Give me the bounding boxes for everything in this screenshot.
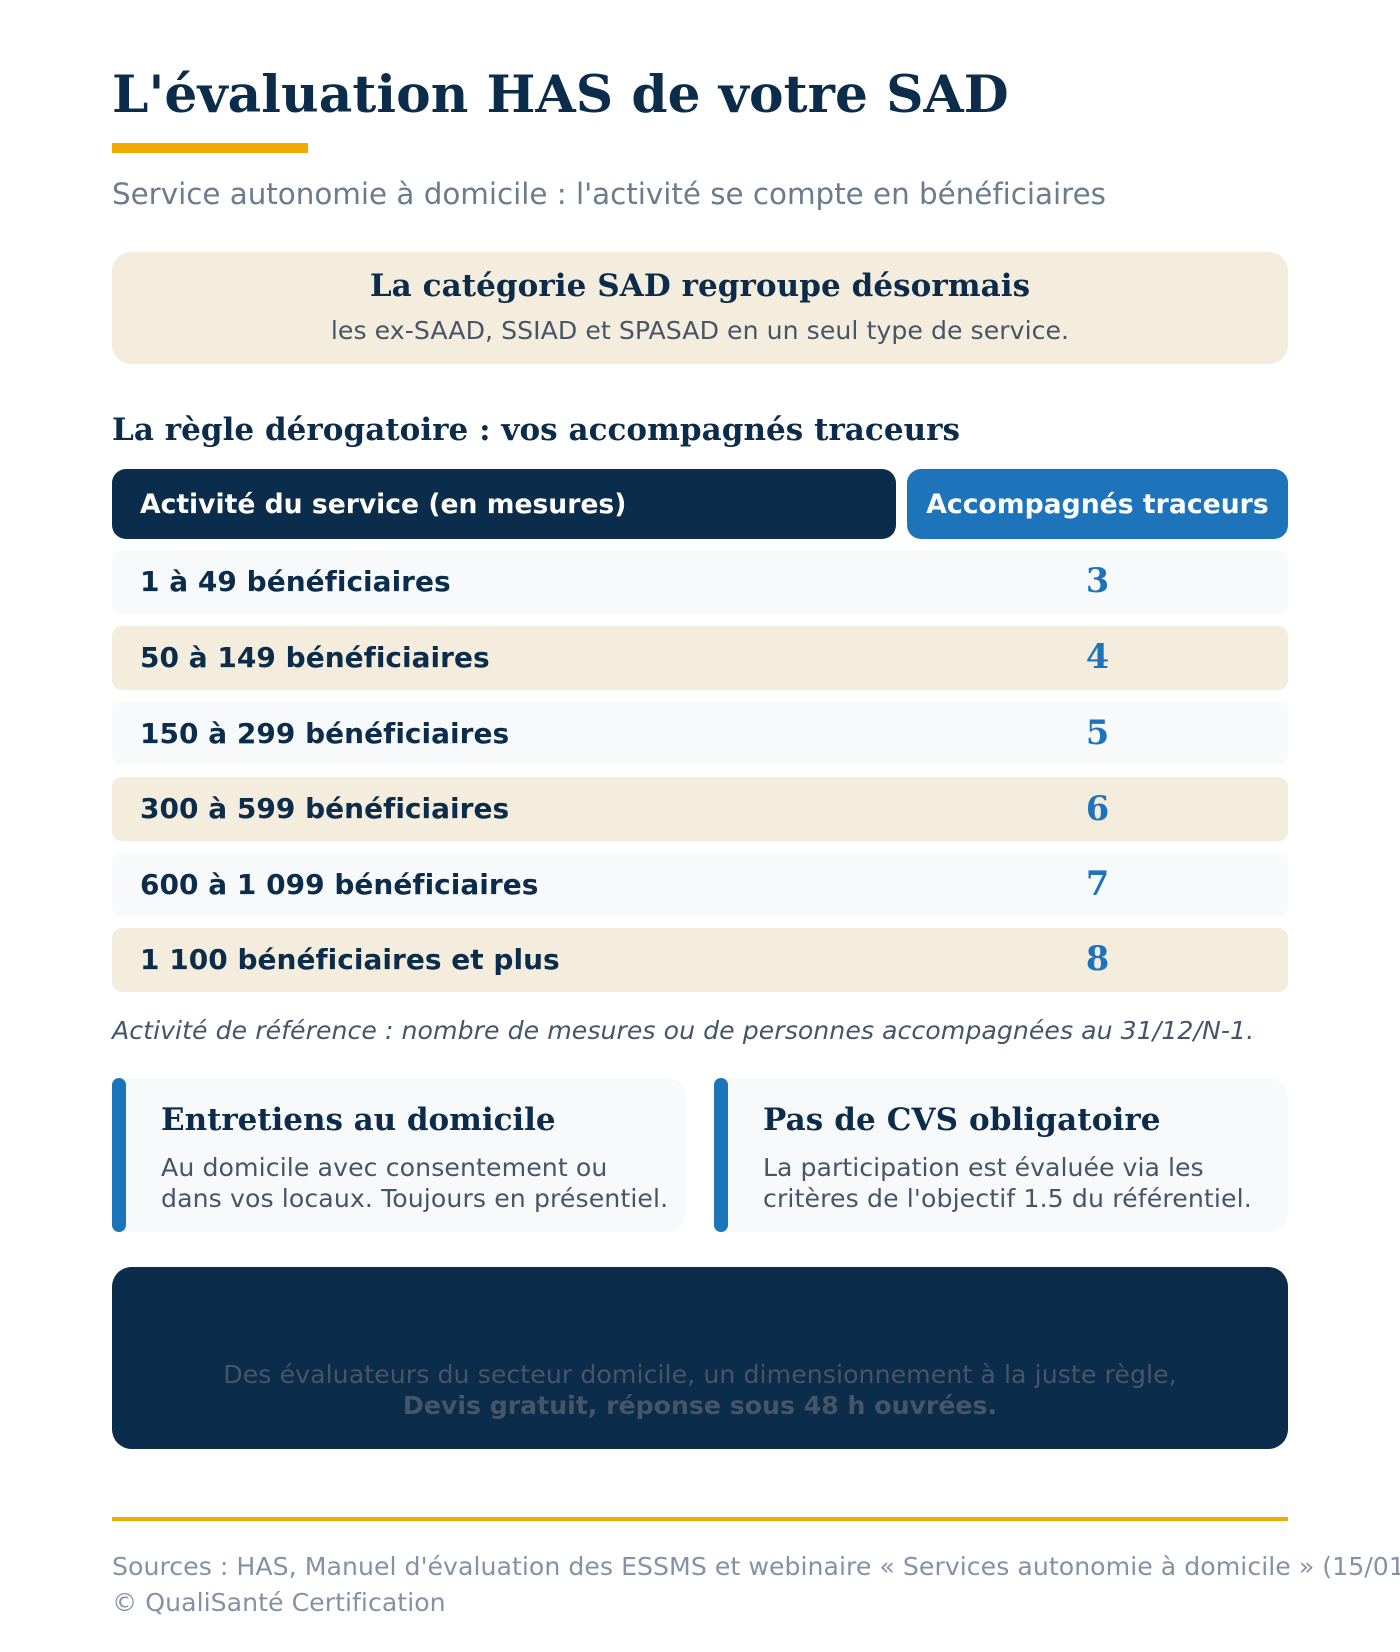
card text: Au domicile avec consentement ou	[161, 1153, 607, 1182]
card text	[763, 1153, 1252, 1213]
table row 5: 7	[1086, 863, 1109, 903]
icon: card accent bar	[112, 1078, 126, 1232]
table row 5: 600 à 1 099 bénéficiaires	[140, 868, 538, 901]
table row 6: 1 100 bénéficiaires et plus	[140, 943, 560, 976]
footer divider	[112, 1517, 1288, 1521]
card heading: Entretiens au domicile	[161, 1102, 556, 1138]
banner heading: La catégorie SAD regroupe désormais	[370, 268, 1030, 304]
banner text: les ex-SAAD, SSIAD et SPASAD en un seul type de service.	[331, 316, 1069, 345]
card text: dans vos locaux. Toujours en présentiel.	[161, 1184, 668, 1213]
footer sources	[112, 1552, 1400, 1617]
header label: Accompagnés traceurs	[926, 488, 1269, 520]
table row 3: 150 à 299 bénéficiaires	[140, 717, 509, 750]
card text: critères de l'objectif 1.5 du référentiel.	[763, 1184, 1252, 1213]
footer sources: Sources : HAS, Manuel d'évaluation des ESSMS et webinaire « Services autonomie à domicile » (15/01	[112, 1552, 1400, 1581]
panel: SAD category banner	[112, 252, 1288, 364]
table row 2: 50 à 149 bénéficiaires	[140, 641, 490, 674]
table row 4: 6	[1086, 788, 1109, 828]
panel: CVS card	[714, 1078, 1288, 1232]
table row 6	[112, 928, 1288, 992]
call to action text	[223, 1360, 1177, 1420]
table row 2: 4	[1086, 636, 1109, 676]
table row 3	[112, 701, 1288, 765]
accent bar	[112, 143, 308, 153]
table row 6: 8	[1086, 938, 1109, 978]
table row 1	[112, 550, 1288, 614]
table footnote: Activité de référence : nombre de mesures ou de personnes accompagnées au 31/12/N-1.	[112, 1016, 1254, 1045]
card text	[161, 1153, 668, 1213]
panel: call to action	[112, 1267, 1288, 1449]
table header: activity	[112, 469, 896, 539]
header label: Activité du service (en mesures)	[140, 488, 626, 520]
table row 2	[112, 626, 1288, 690]
section heading: La règle dérogatoire : vos accompagnés traceurs	[112, 412, 960, 448]
call to action text: Devis gratuit, réponse sous 48 h ouvrées.	[403, 1391, 997, 1420]
panel: home interviews card	[112, 1078, 686, 1232]
card text: La participation est évaluée via les	[763, 1153, 1204, 1182]
card heading: Pas de CVS obligatoire	[763, 1102, 1161, 1138]
subtitle: Service autonomie à domicile : l'activité se compte en bénéficiaires	[112, 177, 1106, 211]
icon: card accent bar	[714, 1078, 728, 1232]
table row 1: 3	[1086, 560, 1109, 600]
table row 4	[112, 777, 1288, 841]
call to action text: Des évaluateurs du secteur domicile, un dimensionnement à la juste règle,	[223, 1360, 1177, 1389]
footer sources: © QualiSanté Certification	[112, 1588, 446, 1617]
table header: tracers	[907, 469, 1288, 539]
table row 4: 300 à 599 bénéficiaires	[140, 792, 509, 825]
table row 1: 1 à 49 bénéficiaires	[140, 565, 451, 598]
title: L'évaluation HAS de votre SAD	[112, 64, 1009, 125]
table row 3: 5	[1086, 712, 1109, 752]
table row 5	[112, 853, 1288, 917]
